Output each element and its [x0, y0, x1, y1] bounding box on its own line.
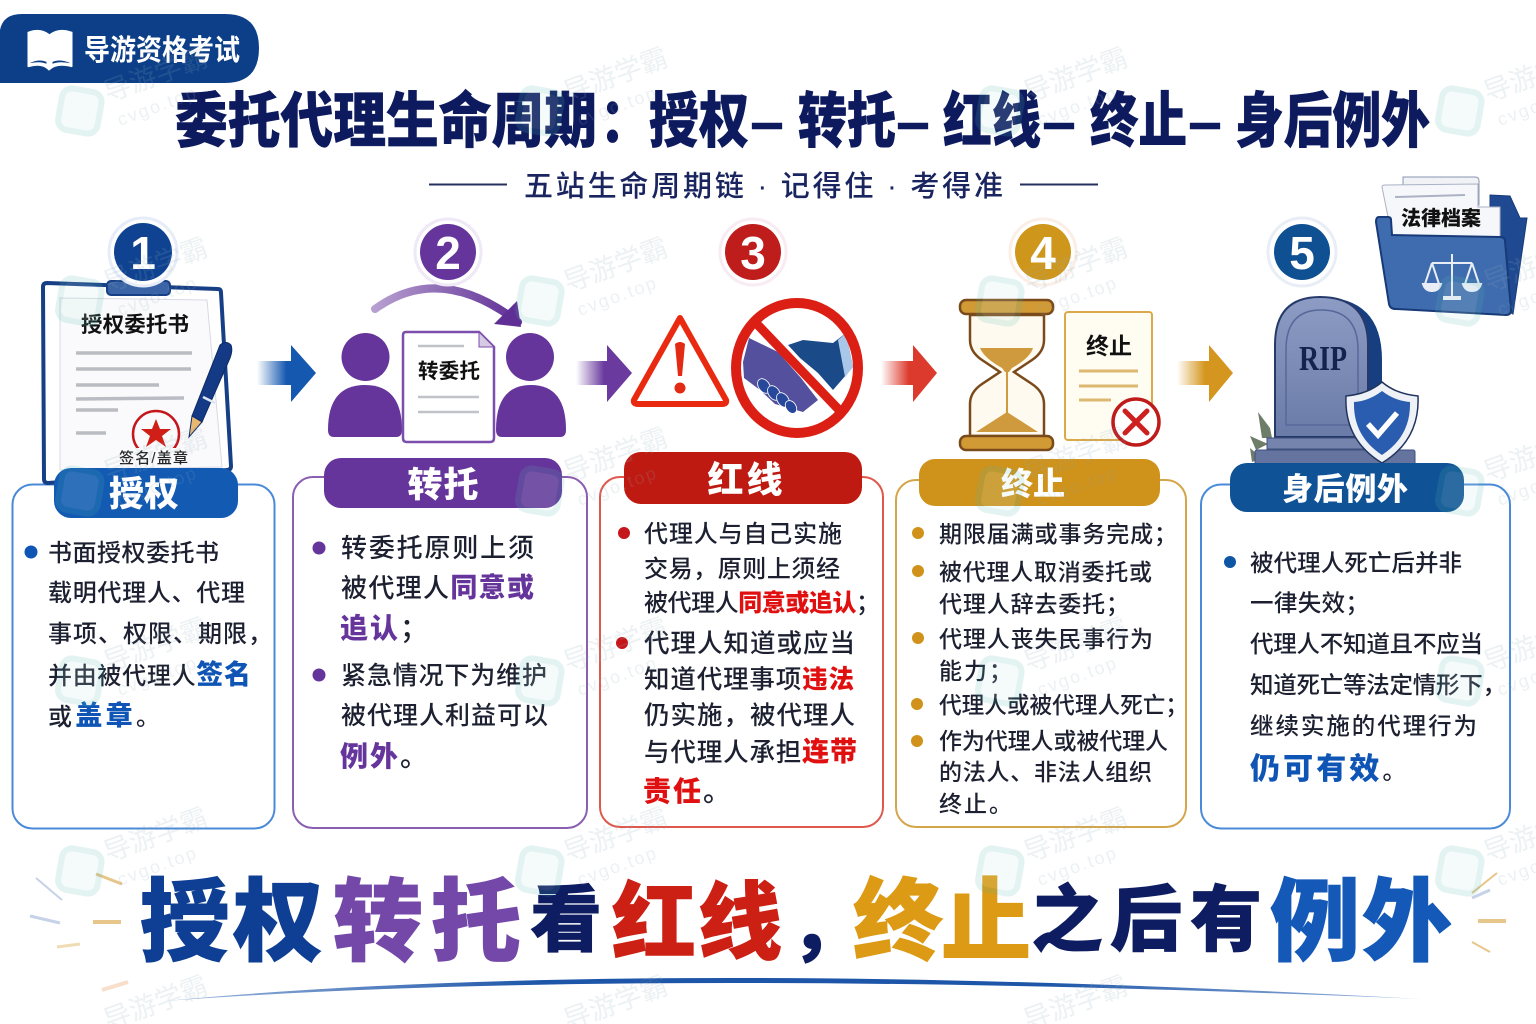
arrow: step 4 to 5 [1177, 345, 1233, 402]
icon: legal archive folder [1376, 177, 1527, 315]
watermark layer: cvgo.top [115, 652, 200, 700]
watermark layer: 导游学霸 [100, 803, 212, 868]
bullet list: 红线: 代理人与自己实施 [644, 521, 842, 548]
heading pill: 红线: 红线 [708, 459, 782, 500]
icon: termination document: 终止 [1086, 333, 1132, 359]
title: — [752, 88, 782, 155]
bullet list: 终止: 的法人、非法人组织 [939, 759, 1152, 785]
bullet list: 终止: 期限届满或事务完成； [939, 521, 1177, 547]
panel: 授权 [12, 484, 274, 828]
title: — [1190, 88, 1220, 155]
step badge 1 [109, 218, 177, 286]
bullet list: 转托: 追认； [340, 612, 428, 644]
bullet list: 身后例外: 继续实施的代理行为 [1250, 713, 1477, 739]
heading pill: 红线 [624, 452, 862, 504]
slogan: 看 [530, 881, 602, 961]
watermark layer: cvgo.top [1035, 272, 1120, 320]
watermark layer: 导游学霸 [560, 423, 672, 488]
icon: open book [28, 31, 72, 69]
bullet list: 转托: 被代理人利益可以 [341, 702, 548, 730]
bullet list: 终止 [911, 521, 1188, 817]
bullet list: 红线: 知道代理事项违法 [644, 666, 854, 694]
decorative sparkles and swoosh under slogan [30, 873, 1506, 1001]
step badge 2: 2 [435, 227, 461, 279]
bullet list: 身后例外 [1224, 550, 1506, 786]
step badge 2 [415, 219, 481, 285]
watermark layer: 导游学霸 [100, 613, 212, 678]
watermark layer: cvgo.top [1035, 462, 1120, 510]
watermark layer: cvgo.top [1035, 652, 1120, 700]
icon: delegating people with document [328, 288, 566, 442]
slogan: ， [790, 888, 862, 968]
step badge 4 [1010, 219, 1076, 285]
title: 授权 [649, 88, 749, 155]
icon: scales [1423, 254, 1481, 298]
top left badge: exam name: 导游资格考试 [84, 34, 240, 67]
watermark layer: cvgo.top [115, 272, 200, 320]
icon: pen [189, 342, 232, 437]
watermark layer: cvgo.top [575, 652, 660, 700]
slogan: 红线 [612, 876, 782, 970]
subtitle: 五站生命周期链 · 记得住 · 考得准 [524, 170, 1003, 203]
bullet list: 授权: 载明代理人、代理 [48, 580, 245, 607]
title: 委托代理生命周期 [175, 88, 597, 155]
bullet list: 终止: 代理人辞去委托； [939, 591, 1129, 617]
bullet list: 红线: 仍实施，被代理人 [644, 702, 855, 730]
slogan: 例外 [1270, 873, 1452, 973]
watermark layer: cvgo.top [1035, 82, 1120, 130]
watermark layer: 导游学霸 [1020, 613, 1132, 678]
watermark layer: 导游学霸 [560, 233, 672, 298]
watermark layer: cvgo.top [115, 462, 200, 510]
watermark layer: 导游学霸 [1020, 43, 1132, 108]
icon: clipboard authorization letter: 授权委托书 [81, 313, 189, 337]
title [175, 88, 1430, 155]
title: ： [600, 88, 650, 155]
bullet list: 终止: 代理人或被代理人死亡； [939, 692, 1188, 718]
bullet list: 终止: 作为代理人或被代理人 [939, 728, 1168, 754]
bullet list: 授权: 并由被代理人签名 [48, 659, 251, 690]
bullet list: 转托: 转委托原则上须 [341, 533, 534, 563]
watermark layer: 导游学霸 [560, 613, 672, 678]
bullet list: 转托 [312, 533, 548, 772]
title: 身后例外 [1235, 88, 1430, 155]
icon: hourglass [960, 300, 1053, 450]
icon: red seal [133, 411, 179, 457]
step badge 5 [1268, 218, 1336, 286]
arrow: step 3 to 4 [881, 345, 937, 402]
title: 红线 [943, 88, 1041, 155]
bullet list: 红线 [616, 521, 880, 807]
bullet list: 转托: 紧急情况下为维护 [341, 662, 547, 690]
watermark layer: cvgo.top [1035, 842, 1120, 890]
bullet list: 身后例外: 一律失效； [1250, 590, 1369, 616]
watermark layer: 导游学霸 [560, 803, 672, 868]
watermark layer: cvgo.top [575, 462, 660, 510]
step badge 4: 4 [1030, 227, 1056, 279]
icon: prohibited handshake [736, 303, 858, 433]
watermark layer: 导游学霸 [1020, 803, 1132, 868]
step badge 5: 5 [1289, 227, 1315, 279]
heading pill: 身后例外: 身后例外 [1282, 472, 1408, 507]
icon: tombstone with shield [1250, 297, 1418, 466]
heading pill: 授权: 授权 [109, 475, 179, 514]
watermark layer: cvgo.top [575, 842, 660, 890]
bullet list: 转托: 被代理人同意或 [341, 572, 534, 603]
bullet list: 终止: 终止。 [939, 791, 1012, 817]
bullet list: 身后例外: 知道死亡等法定情形下， [1250, 672, 1506, 698]
panel: 终止 [896, 480, 1188, 827]
watermark layer: 导游学霸 [1020, 233, 1132, 298]
icon: tombstone with shield: RIP [1299, 339, 1347, 378]
watermark layer: 导游学霸 [100, 43, 212, 108]
arrow: step 1 to 2 [257, 345, 316, 402]
bullet list: 终止: 被代理人取消委托或 [939, 559, 1152, 585]
heading pill: 授权 [54, 468, 238, 518]
icon: termination document [1065, 312, 1159, 445]
bullet list: 终止: 代理人丧失民事行为 [939, 626, 1153, 652]
panel: 身后例外 [1201, 484, 1510, 828]
bullet list: 授权: 书面授权委托书 [48, 540, 219, 567]
step badge 1: 1 [130, 227, 156, 279]
watermark layer: 导游学霸 [1020, 423, 1132, 488]
panel: 红线 [600, 477, 883, 827]
icon: warning triangle [634, 318, 726, 404]
bullet list: 身后例外: 仍可有效。 [1250, 753, 1406, 786]
icon: clipboard authorization letter: 签名/盖章 [119, 449, 188, 467]
arrow: step 2 to 3 [576, 345, 632, 402]
watermark layer: 导游学霸 [100, 423, 212, 488]
slogan: 转托 [333, 873, 521, 973]
heading pill: 终止 [919, 459, 1160, 506]
heading pill: 转托: 转托 [408, 466, 478, 505]
bullet list: 身后例外: 代理人不知道且不应当 [1250, 631, 1483, 657]
slogan: 授权 [140, 873, 323, 973]
icon: legal archive folder: 法律档案 [1401, 206, 1481, 230]
bullet list: 终止: 能力； [939, 658, 1012, 684]
bullet list: 身后例外: 被代理人死亡后并非 [1250, 550, 1462, 576]
icon: clipboard authorization letter [43, 281, 232, 483]
bullet list: 转托: 例外。 [340, 741, 428, 772]
step badge 3: 3 [740, 227, 766, 279]
slogan: 之后有 [1031, 881, 1262, 961]
icon: delegating people with document: 转委托 [418, 360, 480, 383]
bullet list: 红线: 代理人知道或应当 [644, 630, 855, 658]
title: — [1044, 88, 1074, 155]
top left badge: exam name [0, 14, 259, 83]
heading pill: 转托 [324, 458, 562, 508]
watermark layer: cvgo.top [115, 842, 200, 890]
bullet list: 红线: 交易，原则上须经 [644, 556, 840, 583]
slogan [140, 873, 1452, 973]
watermark layer: 导游学霸 [100, 233, 212, 298]
bullet list: 红线: 责任。 [643, 776, 731, 807]
title: 转托 [798, 88, 896, 155]
step badge 3 [720, 219, 786, 285]
watermark layer: cvgo.top [575, 272, 660, 320]
bullet list: 红线: 被代理人同意或追认； [644, 589, 880, 617]
heading pill: 身后例外 [1230, 463, 1464, 512]
bullet list: 授权: 或盖章。 [48, 700, 160, 731]
bullet list: 授权 [24, 540, 272, 731]
title: 终止 [1090, 88, 1187, 155]
slogan: 终止 [853, 873, 1031, 973]
watermark layer: cvgo.top [115, 82, 200, 130]
panel: 转托 [293, 477, 587, 828]
bullet list: 授权: 事项、权限、期限， [48, 621, 272, 648]
icon: shield check [1346, 382, 1418, 463]
watermark layer: cvgo.top [575, 82, 660, 130]
watermark layer: 导游学霸 [560, 43, 672, 108]
title: — [898, 88, 928, 155]
heading pill: 终止: 终止 [1001, 466, 1065, 502]
bullet list: 红线: 与代理人承担连带 [644, 737, 857, 767]
